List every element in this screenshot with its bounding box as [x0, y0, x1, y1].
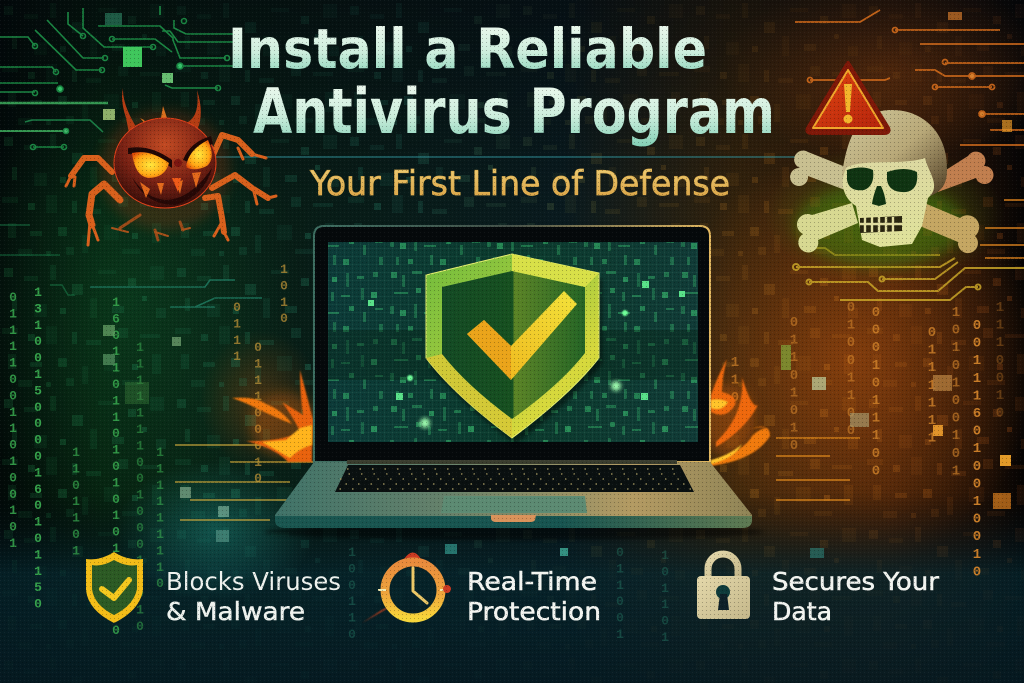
binary rain: left green: 160110110101010111100 [108, 295, 124, 639]
binary rain: right orange [727, 300, 1008, 582]
label [166, 567, 341, 626]
title line 2: Antivirus Program [253, 75, 775, 148]
binary rain: left green: 1101101 [68, 445, 84, 560]
label: Secures Your [772, 567, 940, 596]
trackpad [441, 496, 587, 513]
title line 1: Install a Reliable [228, 17, 707, 81]
binary rain: lower teal [344, 545, 672, 646]
cranium [842, 110, 947, 200]
teeth [860, 216, 902, 233]
gold light streaks by laptop [175, 445, 314, 520]
label [467, 567, 601, 626]
icon: skull and crossbones [790, 63, 993, 265]
binary rain: left green: 13100150000160101150 [30, 285, 46, 613]
binary rain: right orange: 1110010 [992, 300, 1008, 423]
binary rain: right orange: 1010100101 [948, 305, 964, 481]
feature: secures your data [697, 554, 940, 626]
circuit traces: lower right [776, 258, 1024, 500]
icon: padlock [697, 554, 750, 619]
binary rain: gold beside laptop: 1010 [276, 262, 292, 328]
shield [426, 254, 602, 444]
front lip [275, 516, 752, 528]
binary rain: left green: 111111110 [152, 445, 168, 593]
laptop shadow [264, 524, 764, 540]
binary rain: right orange: 01001100 [843, 300, 859, 441]
flames: left [232, 370, 319, 462]
binary rain: lower teal: 011001 [612, 545, 628, 643]
upper bones [790, 151, 993, 192]
bug horns [122, 88, 201, 138]
binary rain: right orange: 0001011100 [868, 305, 884, 481]
feature: real-time protection [362, 552, 601, 626]
subtitle: Your First Line of Defense [309, 164, 730, 204]
bright data blocks [103, 12, 1012, 558]
label: Blocks Viruses [166, 567, 341, 596]
binary rain: right orange: 0111111 [924, 325, 940, 448]
laptop lid [314, 226, 710, 462]
binary rain: gold beside laptop: 011100010 [250, 340, 266, 488]
label: Data [772, 597, 832, 626]
eye sockets [847, 168, 917, 206]
bug brows [128, 147, 172, 168]
binary rain: gold beside laptop: 0111 [230, 300, 244, 366]
laptop [264, 226, 764, 540]
label: Real-Time [467, 567, 597, 596]
binary rain: lower teal: 100110 [344, 545, 360, 643]
face and jaw [843, 158, 934, 247]
icon: virus bug [66, 88, 276, 245]
laptop screen [328, 242, 698, 442]
warning triangle [808, 63, 888, 133]
binary rain: lower teal: 101101 [658, 548, 672, 646]
binary rain: left green: 0111100110100101 [6, 290, 20, 552]
circuit traces: right [795, 10, 1024, 258]
binary rain: right orange: 001116010010010 [969, 318, 985, 582]
check mark [467, 291, 577, 380]
circuit traces: top left [0, 6, 262, 307]
keyboard [335, 465, 694, 492]
lower bones [797, 202, 979, 253]
label: & Malware [166, 597, 305, 626]
binary rain: right orange: 110 [727, 355, 743, 408]
bug legs [66, 135, 276, 245]
binary rain: gold beside laptop [230, 262, 292, 488]
laptop deck [275, 462, 752, 520]
binary rain: right orange: 01101010 [786, 315, 802, 456]
label [772, 567, 940, 626]
binary rain: left green [6, 285, 168, 639]
icon: shield [86, 552, 143, 623]
label: Protection [467, 597, 601, 626]
decorative rule [215, 156, 810, 158]
bug eyes [132, 140, 212, 178]
latch [491, 515, 536, 522]
bug mouth [132, 168, 212, 205]
bug body [114, 118, 216, 208]
icon: clock [362, 552, 451, 623]
screen sparkles [420, 418, 430, 428]
hinge [347, 460, 677, 464]
binary rain: left green: 111111100100011010 [132, 340, 148, 635]
flames: right [702, 359, 770, 466]
feature: blocks viruses [86, 552, 341, 626]
